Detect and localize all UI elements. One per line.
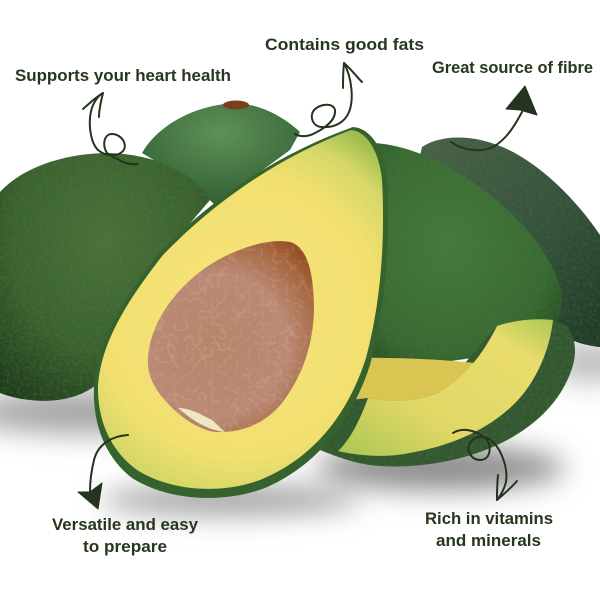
arrow: good fats <box>295 63 362 136</box>
arrow: heart health <box>83 93 138 164</box>
seed papery patch <box>178 408 225 432</box>
slice flesh <box>338 319 553 456</box>
label: Versatile and easy to prepare <box>52 516 199 556</box>
half skin <box>94 127 388 498</box>
label: Great source of fibre: Great source of fibre <box>432 59 593 77</box>
label: Rich in vitamins and minerals: and minerals <box>436 532 541 550</box>
label: Supports your heart health: Supports your heart health <box>15 67 231 85</box>
slice inner cut <box>350 358 476 401</box>
avocado: right <box>355 143 562 366</box>
arrow: fibre <box>451 86 537 150</box>
ground shadow <box>0 342 600 514</box>
half flesh <box>98 130 383 489</box>
slice skin <box>320 320 575 466</box>
label: Versatile and easy to prepare: Versatile and easy <box>52 516 199 534</box>
avocado slice <box>320 319 575 466</box>
avocado: far right dark <box>400 137 600 347</box>
label: Rich in vitamins and minerals <box>425 510 553 550</box>
arrow: versatile <box>78 435 128 509</box>
label: Rich in vitamins and minerals: Rich in vitamins <box>425 510 553 528</box>
label: Contains good fats: Contains good fats <box>265 36 424 54</box>
avocado: top back <box>142 100 300 205</box>
avocado half <box>94 127 388 498</box>
label: Versatile and easy to prepare: to prepare <box>83 538 167 556</box>
seed <box>148 241 314 432</box>
arrow: vitamins <box>453 430 517 500</box>
avocado: left <box>0 153 210 401</box>
stem <box>223 100 249 110</box>
